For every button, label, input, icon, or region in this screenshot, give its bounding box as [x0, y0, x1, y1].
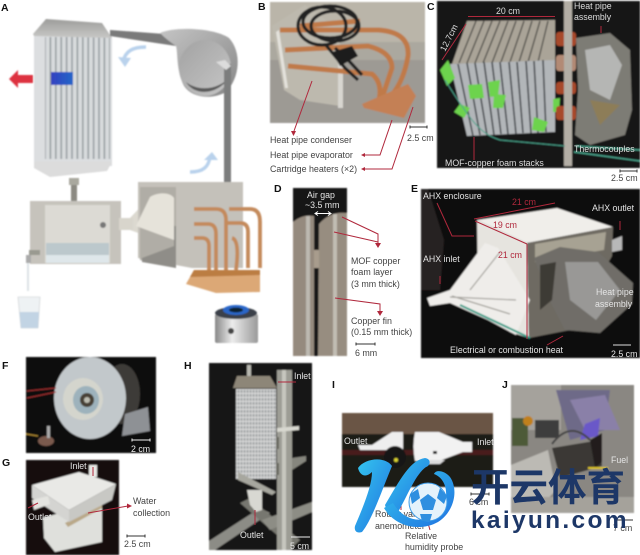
airflow arrow bottom — [190, 156, 210, 172]
panel label A: A — [1, 2, 9, 14]
scale bar I — [471, 492, 489, 496]
labels E: Electrical or combustion heat — [450, 345, 564, 355]
label J: 7 cm — [613, 523, 632, 533]
logo soccer ball — [409, 483, 447, 521]
scale bar J — [615, 519, 633, 521]
copper base block — [186, 270, 260, 293]
red dimension lines E — [437, 203, 620, 345]
arrows I — [401, 496, 430, 530]
labels B: Heat pipe evaporator — [270, 150, 353, 160]
labels C: assembly — [574, 12, 612, 22]
labels B — [270, 133, 434, 174]
labels G: 2.5 cm — [124, 539, 151, 549]
copper heat pipes — [194, 209, 260, 275]
labels C — [438, 1, 638, 183]
labels I — [344, 436, 494, 552]
labels H — [240, 371, 311, 551]
labels I: Inlet — [477, 437, 494, 447]
labels H: 5 cm — [290, 541, 309, 551]
heater enclosure box — [119, 182, 243, 268]
watermark chinese name: 开云体育 — [471, 457, 625, 513]
labels H: Outlet — [240, 530, 264, 540]
panel label J: J — [502, 379, 508, 391]
panel label E: E — [411, 183, 418, 195]
labels G: Inlet — [70, 461, 87, 471]
blower with connecting ducts — [110, 29, 238, 182]
labels B: 2.5 cm — [407, 133, 434, 143]
labels C: Thermocouples — [574, 144, 635, 154]
photo of enclosure — [421, 189, 640, 358]
labels B: Cartridge heaters (×2) — [270, 164, 357, 174]
labels I: Relative — [405, 531, 437, 541]
panel F: blower photo — [2, 357, 156, 454]
panel label F: F — [2, 360, 9, 372]
arrows H — [255, 382, 296, 525]
watermark: kaiyun logo — [355, 457, 629, 534]
logo K mark — [355, 458, 454, 533]
photo of exchanger — [209, 363, 312, 550]
labels E — [423, 191, 637, 359]
labels H: Inlet — [294, 371, 311, 381]
labels D — [351, 256, 412, 358]
labels E: 21 cm — [498, 250, 522, 260]
scale label F: 2 cm — [131, 444, 150, 454]
dimension arrows C — [442, 16, 555, 60]
arrows G — [28, 467, 128, 513]
scale bar G — [127, 534, 145, 538]
labels E: AHX enclosure — [423, 191, 482, 201]
labels E: AHX inlet — [423, 254, 460, 264]
water collection box — [30, 201, 121, 264]
labels C: 2.5 cm — [611, 173, 638, 183]
photo of stacks — [437, 1, 640, 168]
panel label B: B — [258, 1, 266, 13]
labels C: 20 cm — [496, 6, 520, 16]
panel label D: D — [274, 183, 282, 195]
photo of burner — [511, 385, 634, 513]
air gap annotation: ~3.5 mm — [305, 200, 339, 210]
schematic drawing — [9, 19, 260, 343]
photo of box — [26, 460, 119, 555]
scale label F — [131, 438, 150, 454]
labels D: 6 mm — [355, 348, 377, 358]
labels E: assembly — [595, 299, 633, 309]
panel A: system schematic — [1, 2, 260, 343]
scale bar C — [620, 170, 637, 172]
leader: evaporator — [365, 120, 392, 155]
air gap annotation: Air gap — [307, 190, 335, 200]
panel G: water collection box photo — [2, 457, 170, 555]
panel D: air gap macro photo — [274, 183, 412, 358]
arrowheads — [291, 131, 365, 171]
photo of blower — [26, 357, 156, 453]
labels I: Outlet — [344, 436, 368, 446]
drain neck — [71, 178, 77, 201]
funnel inlet — [121, 193, 174, 246]
blue sorbent indicator — [51, 72, 73, 85]
labels B: Heat pipe condenser — [270, 135, 352, 145]
photo of assembly — [270, 2, 425, 123]
scale bar D — [356, 342, 375, 346]
water tap and drip — [26, 250, 40, 291]
labels E: 19 cm — [493, 220, 517, 230]
labels G: Water — [133, 496, 156, 506]
heat exchanger — [33, 19, 112, 177]
labels D: Copper fin — [351, 316, 392, 326]
labels E: AHX outlet — [592, 203, 635, 213]
label J: Fuel — [611, 455, 628, 465]
panel B: heat pipe assembly photo — [258, 1, 434, 174]
labels I: anemometer — [375, 521, 425, 531]
labels I: 6 cm — [469, 497, 488, 507]
leader arrows D — [334, 217, 380, 312]
leader: condenser — [294, 81, 312, 131]
photo of duct — [342, 413, 493, 487]
panel J: combustion heating photo — [502, 379, 634, 533]
scale bar H — [291, 536, 310, 538]
watermark url: kaiyun.com — [471, 507, 629, 534]
panel C: MOF copper foam stacks photo — [427, 1, 640, 183]
label J — [611, 455, 632, 533]
labels E: Heat pipe — [596, 287, 634, 297]
arrowheads D — [375, 243, 383, 316]
airflow arrow top — [123, 47, 146, 62]
scale bar B — [410, 126, 427, 128]
panel H: adsorption heat exchanger on stand — [184, 360, 312, 551]
panel label H: H — [184, 360, 192, 372]
panel label C: C — [427, 1, 435, 13]
leader arrows C — [474, 26, 601, 160]
panel label I: I — [332, 379, 335, 391]
labels C: Heat pipe — [574, 1, 612, 11]
panel label G: G — [2, 457, 10, 469]
labels G — [28, 461, 170, 549]
water glass — [18, 297, 40, 328]
labels E: 2.5 cm — [611, 349, 637, 359]
labels I: Rotary vane — [375, 509, 423, 519]
hot air outlet arrow — [9, 70, 33, 88]
air gap annotation — [305, 190, 339, 216]
labels D: foam layer — [351, 267, 392, 277]
labels I: humidity probe — [405, 542, 463, 552]
labels C: MOF-copper foam stacks — [445, 158, 544, 168]
scale bar E — [613, 344, 631, 346]
labels G: collection — [133, 508, 170, 518]
panel E: AHX enclosure photo — [411, 183, 640, 359]
burner cylinder — [215, 305, 258, 343]
leader: cartridge heaters — [365, 107, 413, 169]
photo of fins — [293, 188, 347, 356]
labels D: (3 mm thick) — [351, 279, 400, 289]
arrowhead G — [127, 504, 132, 508]
labels D: (0.15 mm thick) — [351, 327, 412, 337]
labels G: Outlet — [28, 512, 52, 522]
labels C: 12.7cm — [438, 23, 460, 53]
labels E: 21 cm — [512, 197, 536, 207]
panel I: duct with anemometer photo — [332, 379, 494, 552]
labels D: MOF copper — [351, 256, 400, 266]
